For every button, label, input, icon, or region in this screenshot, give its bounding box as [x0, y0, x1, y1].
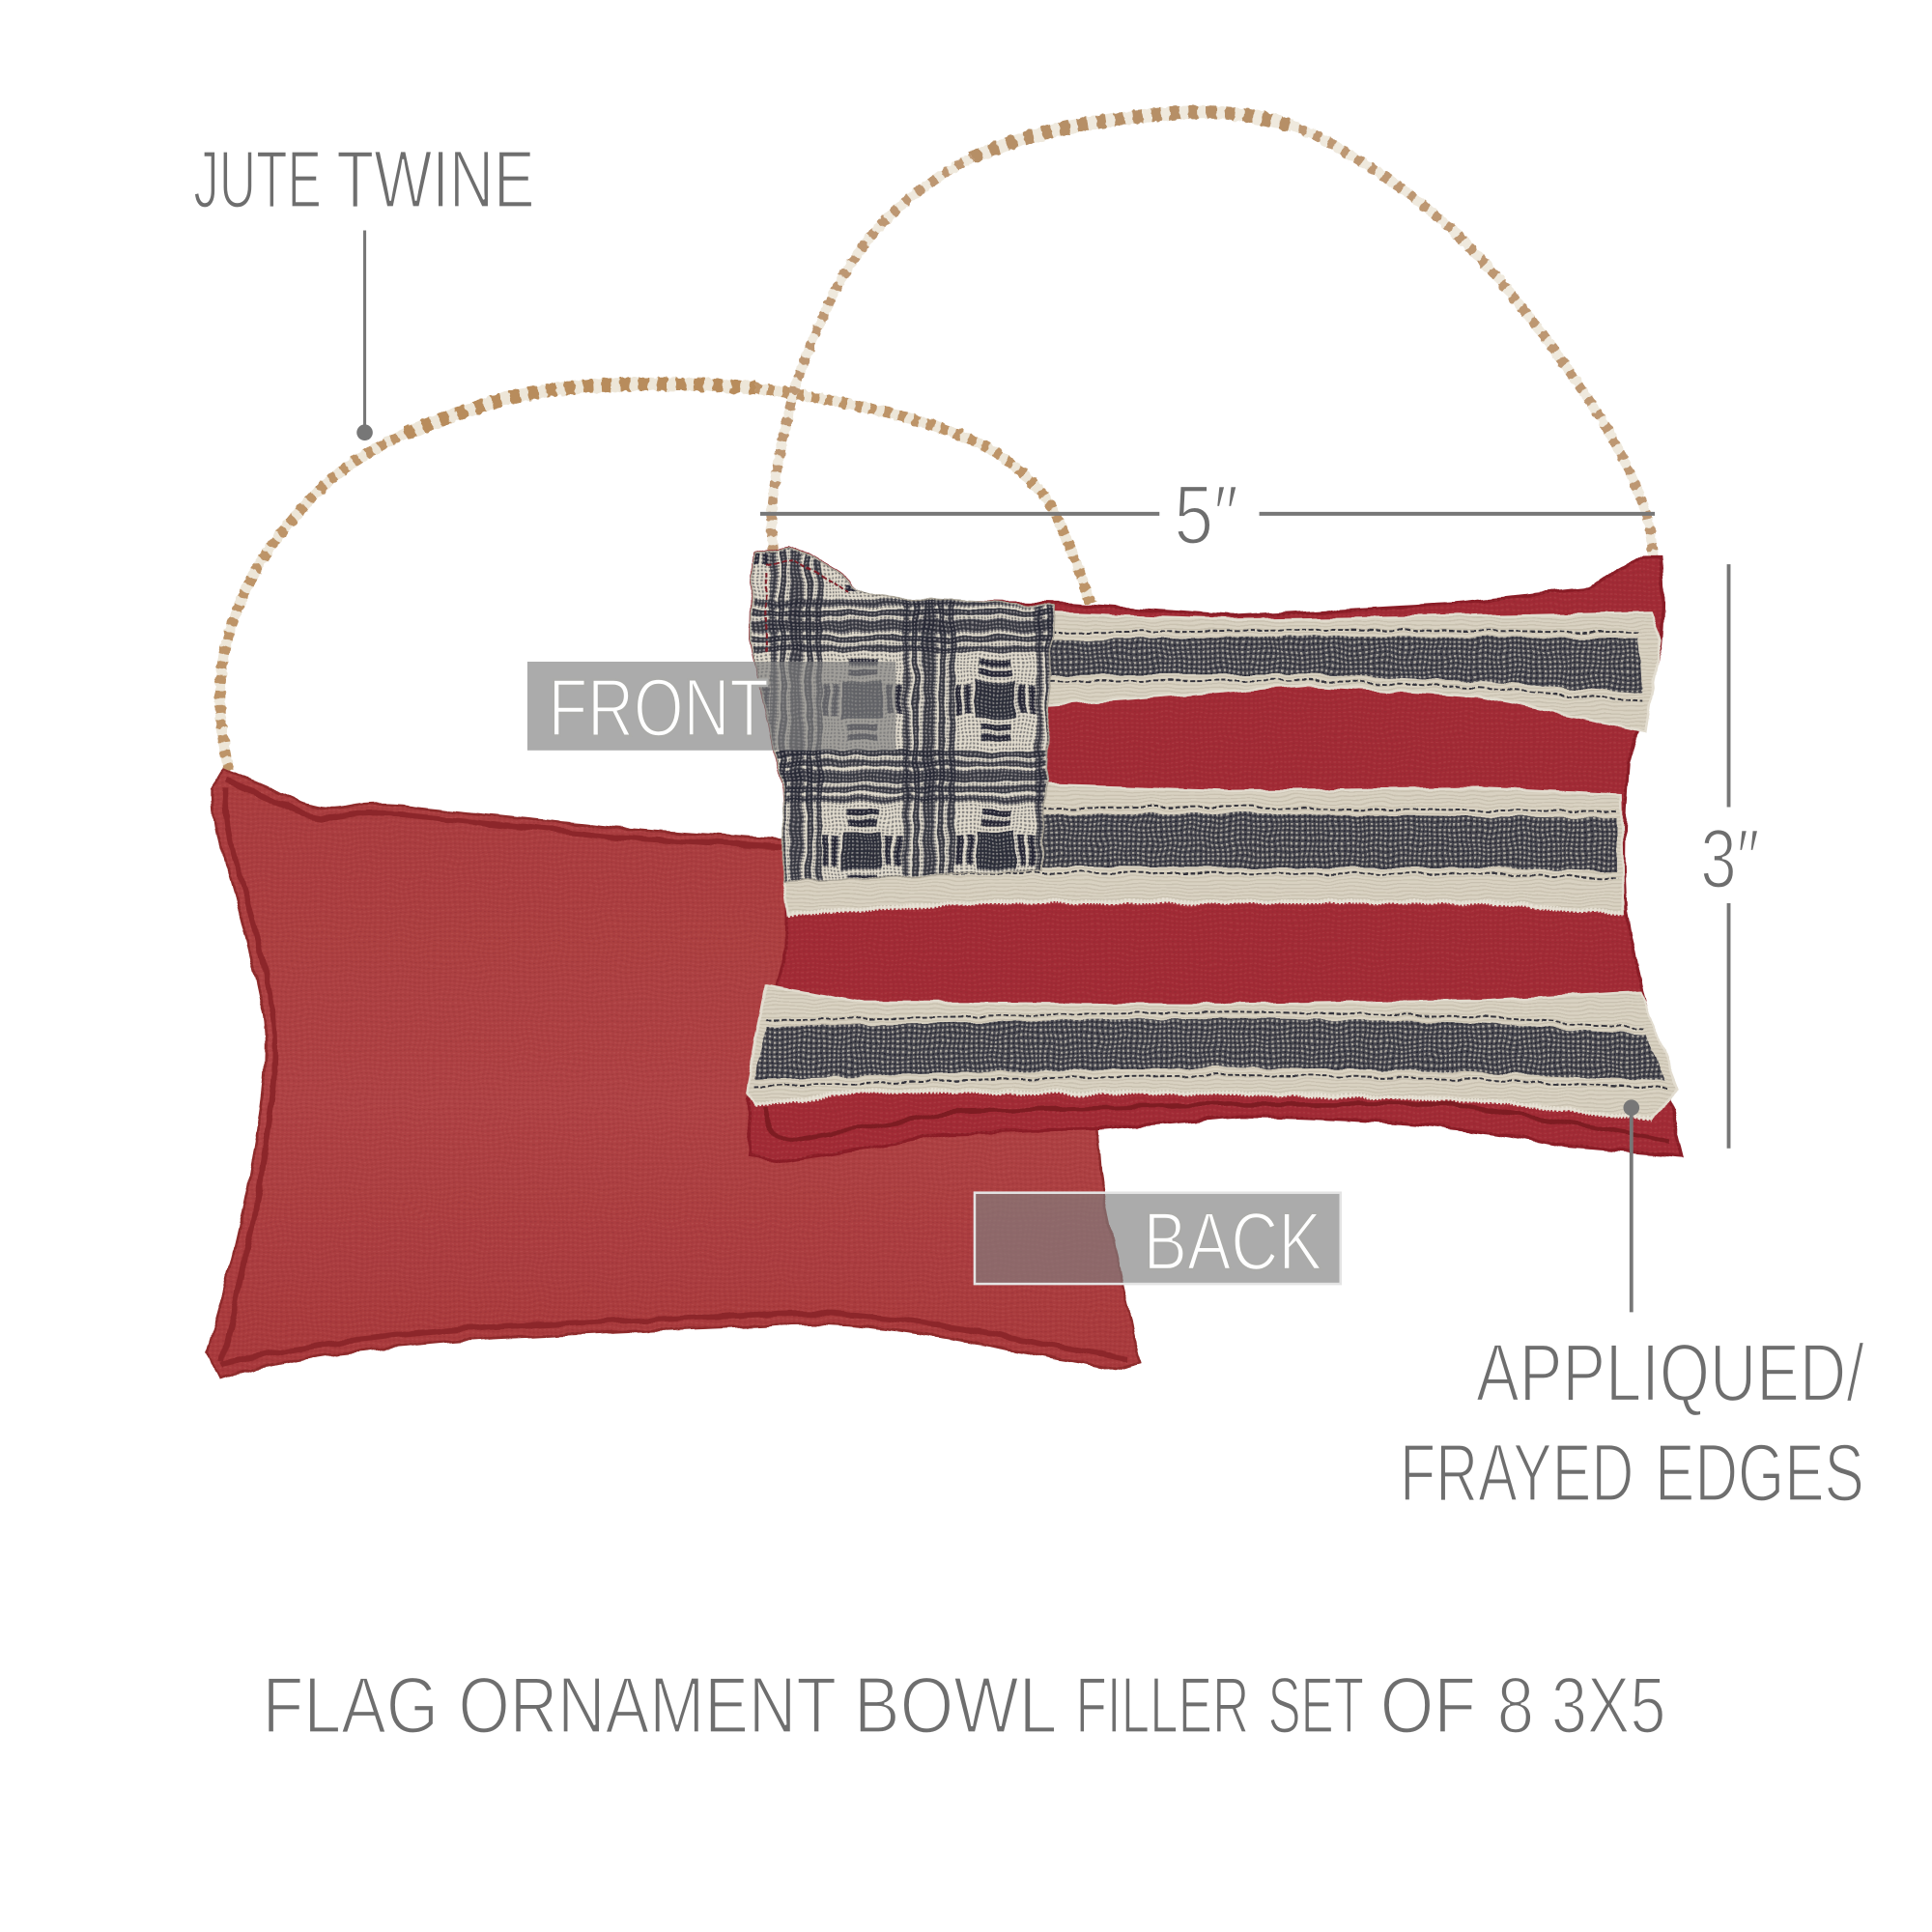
title: SET: [1267, 1660, 1364, 1749]
front pillow red body: [747, 547, 1683, 1161]
title: OF: [1380, 1660, 1476, 1749]
title: FILLER: [1076, 1660, 1249, 1749]
title: 8: [1497, 1660, 1534, 1749]
plaid canton: [752, 547, 1054, 882]
back pillow: [207, 770, 1141, 1378]
back pillow twine loop: [220, 384, 1091, 771]
callout: appliqued and frayed edges: [1400, 1099, 1864, 1519]
callout: jute twine: TWINE: [336, 133, 535, 224]
top stripe: [1047, 612, 1661, 730]
title: [263, 1660, 1665, 1749]
middle stripe: [783, 784, 1624, 914]
dimension: height 3 inches: 3″: [1700, 811, 1759, 905]
front pillow twine loop: [771, 112, 1654, 557]
dimension: width 5 inches: 5″: [1175, 468, 1238, 561]
front label: FRONT: [549, 662, 769, 753]
callout: jute twine: JUTE: [193, 133, 322, 224]
title: FLAG: [263, 1660, 439, 1749]
front pillow: flag: [747, 547, 1683, 1161]
back label: BACK: [1144, 1196, 1322, 1287]
callout: appliqued and frayed edges: FRAYED: [1400, 1428, 1634, 1519]
callout: jute twine: [193, 133, 535, 440]
front pillow seam line: [764, 1104, 1669, 1141]
title: ORNAMENT: [458, 1660, 837, 1749]
back label: [975, 1193, 1341, 1287]
title: BOWL: [854, 1660, 1057, 1749]
front pillow fabric weave: [747, 547, 1683, 1161]
callout: appliqued and frayed edges: EDGES: [1655, 1428, 1864, 1519]
bottom stripe: [747, 985, 1678, 1119]
title: 3X5: [1551, 1660, 1665, 1749]
